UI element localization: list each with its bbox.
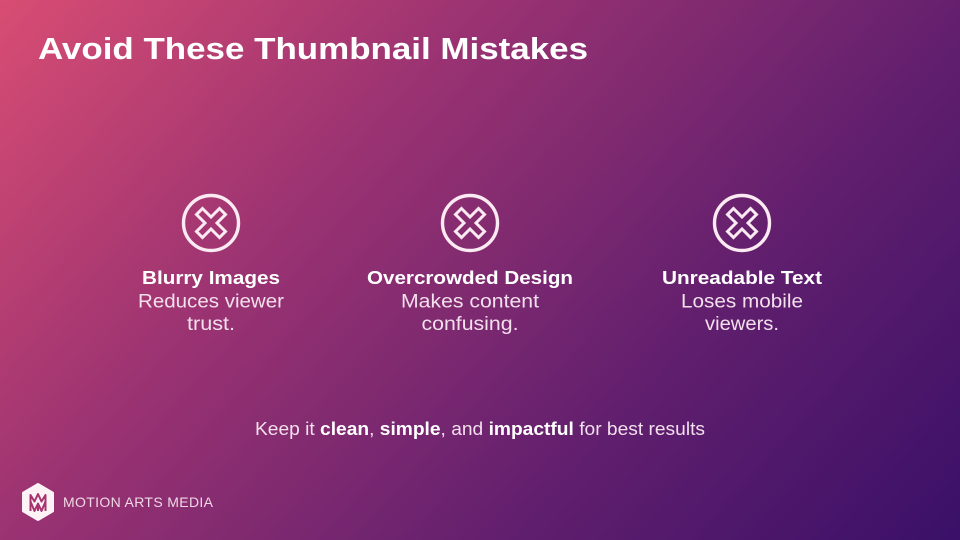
description: unreadable text: Loses mobile [681, 292, 803, 312]
heading: unreadable text: Unreadable Text [662, 267, 822, 288]
icon: blurry images cross [184, 196, 238, 250]
column: overcrowded design [367, 196, 573, 335]
logo: motion arts media [24, 484, 214, 520]
icon: hexagon logo [24, 484, 52, 520]
column: unreadable text [662, 196, 822, 335]
description: unreadable text [681, 292, 803, 335]
heading: overcrowded design: Overcrowded Design [367, 267, 573, 288]
heading: blurry images: Blurry Images [142, 267, 280, 288]
description: overcrowded design [401, 292, 540, 335]
title: Avoid These Thumbnail Mistakes [38, 32, 588, 66]
column: blurry images [138, 196, 285, 335]
description: unreadable text: viewers. [705, 314, 779, 335]
description: blurry images [138, 292, 285, 335]
description: blurry images: trust. [187, 314, 235, 335]
takeaway line: Keep it clean, simple, and impactful for best results [255, 419, 705, 439]
icon: overcrowded design cross [442, 196, 498, 250]
description: blurry images: Reduces viewer [138, 292, 285, 312]
logo wordmark: MOTION ARTS MEDIA [63, 494, 214, 510]
description: overcrowded design: Makes content [401, 292, 540, 312]
icon: unreadable text cross [714, 196, 770, 250]
description: overcrowded design: confusing. [422, 314, 518, 335]
